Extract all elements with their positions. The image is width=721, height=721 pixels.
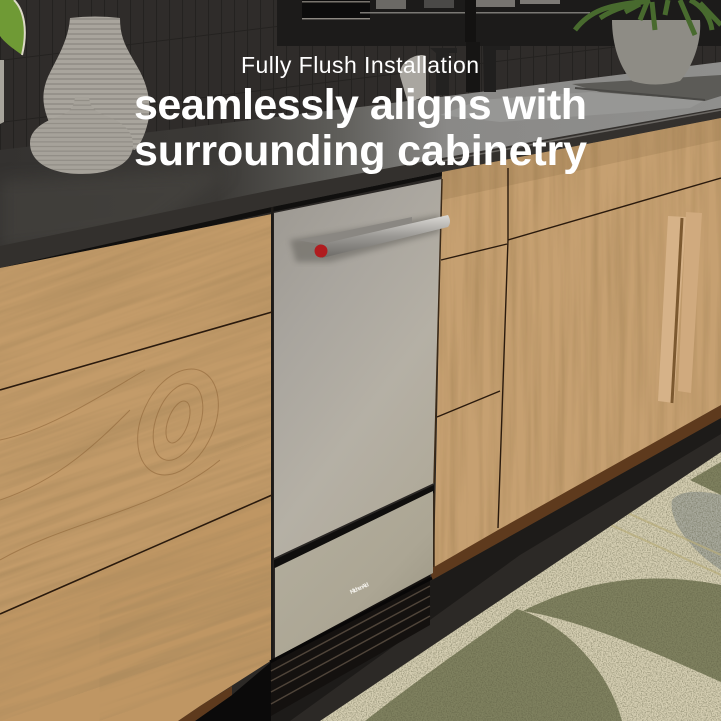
counter front edge	[0, 108, 721, 268]
large ribbed vase	[43, 16, 150, 150]
dishwasher	[274, 179, 450, 658]
door gap	[274, 485, 434, 568]
countertop	[0, 62, 721, 274]
cabinet seams	[437, 168, 721, 528]
handle	[296, 215, 450, 258]
vases	[30, 16, 150, 174]
toe kick and floor	[0, 405, 721, 721]
sink	[572, 75, 721, 101]
vent grille	[270, 575, 432, 716]
heading: surrounding cabinetry	[134, 127, 587, 175]
window frame	[277, 0, 721, 46]
wood cabinets right	[430, 110, 721, 580]
lower drawer	[275, 491, 433, 658]
drawer seams	[0, 312, 272, 614]
backsplash wall	[0, 0, 721, 160]
heading	[134, 81, 587, 175]
small ribbed vase	[30, 97, 133, 174]
wood cabinets left	[0, 174, 274, 721]
fern leaves	[575, 0, 721, 35]
upper door	[274, 179, 442, 558]
handle shadow	[290, 215, 440, 262]
cabinet handles	[658, 212, 702, 403]
patterned rug	[320, 450, 721, 721]
subheading: Fully Flush Installation	[241, 52, 479, 78]
heading: seamlessly aligns with	[134, 81, 587, 129]
leaf shapes	[523, 579, 721, 682]
plant leaf top left	[0, 0, 25, 124]
plant pot	[575, 0, 721, 84]
logo badge: KitchenAid	[349, 582, 370, 596]
faucet and soap dispenser	[400, 0, 510, 103]
wood grain swirl	[0, 368, 220, 560]
